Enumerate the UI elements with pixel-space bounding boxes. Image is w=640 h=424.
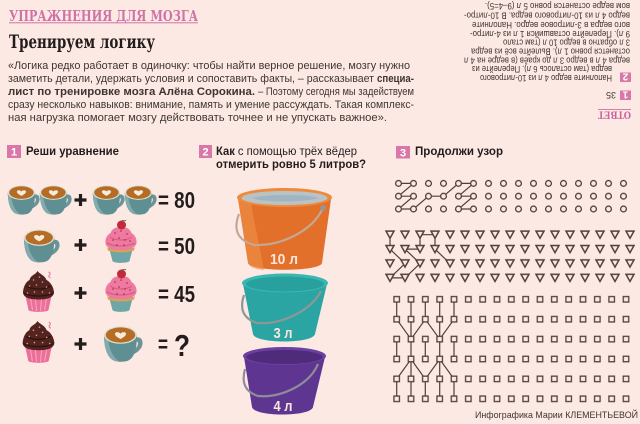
equation row 4: = — [158, 331, 168, 357]
intro text: ная нагрузка помогает мозгу действовать точнее и не упускать важное». — [8, 112, 387, 124]
heading: puzzle 2: Как с помощью трёх вёдер — [216, 144, 357, 158]
circle pattern — [391, 177, 631, 215]
rubric heading: УПРАЖНЕНИЯ ДЛЯ МОЗГА — [9, 8, 198, 25]
heading: puzzle 1: 1 — [11, 146, 17, 158]
answers heading: ОТВЕТ — [598, 108, 631, 120]
answer 2: ведро 4 л из 10-литрового ведра. В 10-литро- — [464, 11, 630, 21]
equation row 2: = 50 — [158, 233, 195, 259]
heading: puzzle 2: 2 — [202, 146, 209, 158]
equation row 3 — [23, 269, 195, 312]
equation row 1: = 80 — [158, 187, 195, 213]
purple bucket 4 l: 4 л — [274, 398, 292, 415]
teal bucket 3 l: 3 л — [274, 325, 292, 342]
panel: puzzle 3 patterns — [382, 144, 638, 409]
orange bucket 10 l — [236, 188, 332, 270]
equation row 3: = 45 — [158, 281, 195, 307]
answer 2 — [464, 1, 631, 83]
panel: puzzle 2 buckets — [199, 144, 366, 415]
purple bucket 4 l — [243, 347, 326, 415]
heading: puzzle 3: Продолжи узор — [415, 144, 503, 158]
upside-down answers block — [464, 1, 631, 120]
heading: puzzle 2: отмерить ровно 5 литров? — [216, 157, 366, 171]
equation row 2 — [24, 220, 195, 263]
intro text: – Поэтому сегодня мы задействуем — [258, 86, 414, 98]
equation row 1 — [8, 185, 195, 215]
answer 2: ведра (там осталось 6 л). Перелейте из — [472, 64, 612, 74]
answer 2: вого ведра в 3-литровое ведро. Наполните — [472, 20, 630, 30]
intro text: заметить детали, удержать условия и сопоставить факты, – рассказывает — [8, 73, 374, 85]
intro text: специа- — [377, 73, 414, 85]
panel: puzzle 1 equations — [7, 144, 195, 363]
equation row 4: ? — [174, 328, 190, 363]
heading: puzzle 1: Реши уравнение — [26, 144, 119, 158]
teal bucket 3 l — [242, 274, 328, 342]
heading: puzzle 3: 3 — [400, 148, 406, 160]
intro text: сразу несколько навыков: внимание, память и умение рассуждать. Такая комплекс- — [8, 99, 414, 111]
answer 1: 35 — [606, 90, 616, 100]
heading: puzzle 2 — [199, 144, 366, 171]
answer 2: 2 — [622, 70, 628, 82]
intro text — [8, 60, 414, 124]
answer 2: вом ведре останется ровно 5 л (9–4=5). — [485, 1, 630, 11]
answer 2: 9 л). Перелейте оставшийся 1 л из 4-литро- — [470, 29, 630, 39]
intro text: лист по тренировке мозга Алёна Сорокина. — [8, 86, 255, 98]
answer 2: Наполните ведро 4 л из 10-литрового — [480, 73, 612, 83]
square pattern — [390, 289, 633, 409]
triangle pattern — [382, 228, 638, 285]
intro text: «Логика редко работает в одиночку: чтобы найти верное решение, мозгу нужно — [8, 60, 410, 72]
answer 1: 1 — [622, 88, 628, 100]
equation row 4 — [23, 321, 190, 363]
answer 1 — [606, 88, 631, 100]
title: Тренируем логику — [9, 32, 155, 53]
answer 2: ведра 4 л в ведро 3 л до краёв (в ведре на 4 л — [464, 56, 630, 66]
orange bucket 10 l: 10 л — [270, 251, 298, 268]
answer 2: останется ровно 1 л). Вылейте всё из ведра — [471, 47, 630, 57]
answer 2: 3 л обратно в ведро 10 л (там стало — [503, 38, 630, 48]
